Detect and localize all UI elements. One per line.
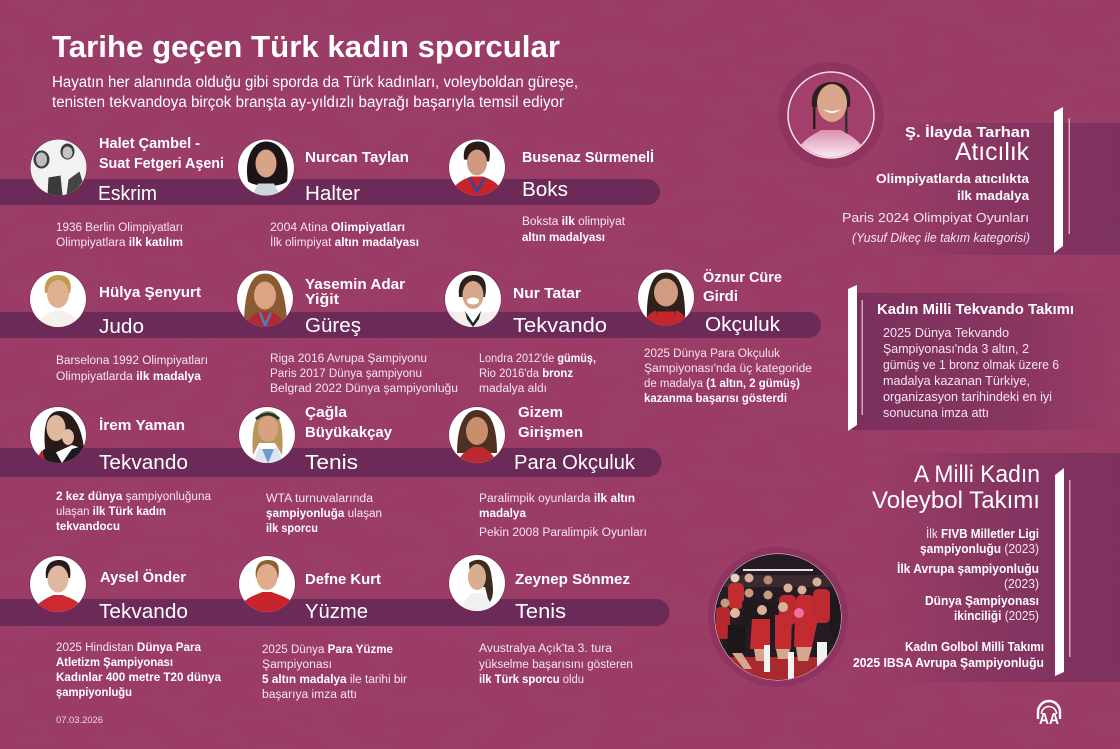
name: Suat Fetgeri Aşeni	[99, 156, 224, 172]
description: şampiyonluğu (2023)	[920, 542, 1039, 556]
sport: Tekvando	[513, 315, 607, 337]
description: 2025 Dünya Para Okçuluk	[644, 348, 780, 360]
name: Defne Kurt	[305, 572, 381, 588]
sport: Halter	[305, 183, 360, 205]
description: organizasyon tarihindeki en iyi	[883, 390, 1052, 404]
description	[270, 222, 419, 249]
description	[266, 493, 382, 535]
portrait: Busenaz Sürmeneli	[449, 140, 505, 196]
sport: Boks	[522, 179, 568, 201]
description: şampiyonluğu	[56, 687, 132, 699]
athlete: Busenaz Sürmeneli	[448, 139, 654, 244]
description	[56, 355, 208, 383]
description	[897, 527, 1039, 623]
panel: Ş. İlayda Tarhan	[778, 62, 1120, 255]
sport: Tekvando	[99, 601, 188, 623]
portrait: Yasemin Adar Yiğit	[237, 270, 293, 326]
description: Pekin 2008 Paralimpik Oyunları	[479, 527, 647, 539]
name: Gizem	[518, 405, 563, 421]
description: 2 kez dünya şampiyonluğuna	[56, 491, 212, 503]
description: Paralimpik oyunlarda ilk altın	[479, 493, 635, 505]
name: Nur Tatar	[513, 286, 581, 302]
portrait: Halet Çambel and Suat Fetgeri Aşeni	[30, 140, 86, 196]
name	[518, 405, 583, 441]
white bar	[1055, 468, 1064, 676]
description: 2025 Hindistan Dünya Para	[56, 642, 202, 654]
description: (Yusuf Dikeç ile takım kategorisi)	[852, 231, 1030, 245]
heading: Voleybol Takımı	[872, 487, 1040, 514]
description: Rio 2016'da bronz	[479, 368, 573, 380]
description: Kadınlar 400 metre T20 dünya	[56, 672, 222, 684]
name: Girişmen	[518, 425, 583, 441]
description: Boksta ilk olimpiyat	[522, 216, 626, 228]
portrait: Aysel Önder	[30, 556, 86, 612]
logo: AA	[1038, 701, 1060, 728]
description	[644, 348, 812, 405]
description: Belgrad 2022 Dünya şampiyonluğu	[270, 383, 458, 395]
name: Nurcan Taylan	[305, 150, 409, 166]
description: madalya kazanan Türkiye,	[883, 374, 1030, 388]
description: WTA turnuvalarında	[266, 493, 374, 505]
description: madalya	[479, 508, 527, 520]
logo: AA: AA	[1039, 711, 1059, 728]
description: ulaşan ilk Türk kadın	[56, 506, 166, 518]
sport: Tenis	[305, 452, 358, 474]
description	[262, 644, 407, 701]
description: de madalya (1 altın, 2 gümüş)	[644, 378, 800, 390]
band: row 1	[0, 179, 660, 205]
panel: A Milli Kadın Voleybol Takımı	[708, 453, 1120, 687]
description: Avustralya Açık'ta 3. tura	[479, 643, 613, 655]
athlete: Yasemin Adar Yiğit	[236, 270, 458, 395]
description: ilk sporcu	[266, 523, 318, 535]
description	[842, 172, 1030, 245]
description: şampiyonluğa ulaşan	[266, 508, 382, 520]
description: 2004 Atina Olimpiyatları	[270, 222, 405, 234]
athlete: Çağla Büyükakçay	[238, 405, 392, 535]
description	[479, 353, 596, 395]
date: 07.03.2026	[56, 715, 103, 726]
heading: A Milli Kadın	[914, 461, 1040, 488]
name: Busenaz Sürmenelİ	[522, 149, 654, 166]
portrait: Hülya Şenyurt	[30, 271, 86, 327]
name: Ş. İlayda Tarhan	[905, 124, 1030, 141]
name: Girdi	[703, 289, 738, 305]
name: Öznur Cüre	[703, 269, 782, 286]
white bar	[1054, 107, 1063, 253]
name	[305, 277, 405, 308]
name: Zeynep Sönmez	[515, 572, 630, 588]
athlete: Nurcan Taylan	[237, 139, 419, 249]
description: (2023)	[1004, 577, 1039, 591]
description	[56, 491, 212, 533]
name	[99, 136, 224, 172]
portrait: Nur Tatar	[445, 271, 501, 327]
description: kazanma başarısı gösterdi	[644, 393, 787, 405]
portrait: Defne Kurt	[239, 556, 295, 612]
name: Halet Çambel -	[99, 136, 200, 152]
description: Olimpiyatlarda atıcılıkta	[876, 172, 1030, 186]
sport: Judo	[99, 316, 144, 338]
athlete: Gizem Girişmen	[448, 405, 647, 539]
description: 1936 Berlin Olimpiyatları	[56, 222, 183, 234]
athlete: Hülya Şenyurt	[29, 270, 208, 383]
athlete: Halet Çambel and Suat Fetgeri Aşeni	[30, 136, 224, 249]
description: 2025 Dünya Tekvando	[883, 326, 1009, 340]
sport: Güreş	[305, 315, 361, 337]
Goalball text: 2025 IBSA Avrupa Şampiyonluğu	[853, 656, 1044, 670]
name	[703, 269, 782, 305]
white bar	[848, 285, 857, 431]
description: 2025 Dünya Para Yüzme	[262, 644, 393, 656]
band: row 3	[0, 448, 662, 477]
description: Olimpiyatlara ilk katılım	[56, 237, 183, 249]
portrait: İrem Yaman	[30, 407, 86, 463]
sport: Para Okçuluk	[514, 452, 636, 474]
description: Dünya Şampiyonası	[925, 594, 1039, 608]
portrait: Ş. İlayda Tarhan	[778, 62, 884, 168]
description	[56, 222, 183, 249]
panel: Kadın Milli Tekvando Takımı	[848, 285, 1120, 431]
description	[270, 353, 458, 395]
name: Çağla	[305, 405, 348, 421]
description: İlk olimpiyat altın madalyası	[270, 236, 419, 249]
sport: Tekvando	[99, 452, 188, 474]
sport: Atıcılık	[955, 138, 1029, 166]
description: madalya aldı	[479, 383, 547, 395]
sport: Okçuluk	[705, 314, 781, 336]
description	[479, 643, 633, 686]
sport: Yüzme	[305, 601, 368, 623]
description	[522, 216, 626, 244]
name	[305, 405, 392, 441]
portrait: Gizem Girişmen	[449, 407, 505, 463]
athlete: İrem Yaman	[29, 406, 212, 533]
description: 5 altın madalya ile tarihi bir	[262, 674, 407, 686]
description: Londra 2012'de gümüş,	[479, 353, 596, 365]
portrait: Zeynep Sönmez	[449, 555, 505, 611]
title: Tarihe geçen Türk kadın sporcular	[52, 29, 560, 64]
description: Şampiyonası	[262, 659, 332, 671]
description: Olimpiyatlarda ilk madalya	[56, 371, 202, 383]
portrait: Çağla Büyükakçay	[239, 407, 295, 463]
name: Yasemin Adar	[305, 277, 405, 293]
team photo	[708, 547, 848, 687]
athlete: Nur Tatar	[444, 270, 607, 395]
description: Paris 2024 Olimpiyat Oyunları	[842, 211, 1029, 225]
sport: Eskrim	[98, 183, 157, 205]
athlete: Öznur Cüre Girdi	[637, 269, 812, 405]
description: ilk madalya	[957, 189, 1030, 203]
portrait: Nurcan Taylan	[238, 140, 294, 196]
name: Hülya Şenyurt	[99, 285, 201, 301]
description: sonucuna imza attı	[883, 406, 989, 420]
subtitle: Hayatın her alanında olduğu gibi sporda da Türk kadınları, voleyboldan güreşe,	[52, 74, 578, 91]
description: İlk FIVB Milletler Ligi	[926, 527, 1039, 541]
description: ilk Türk sporcu oldu	[479, 674, 584, 686]
description: tekvandocu	[56, 521, 120, 533]
band: row 2	[0, 312, 821, 338]
name: İrem Yaman	[99, 417, 185, 434]
subtitle: tenisten tekvandoya birçok branşta ay-yıldızlı bayrağı başarıyla temsil ediyor	[52, 94, 564, 111]
description: yükselme başarısını gösteren	[479, 659, 633, 671]
heading	[872, 461, 1040, 514]
description: Atletizm Şampiyonası	[56, 657, 173, 669]
description: başarıya imza attı	[262, 689, 357, 701]
description	[56, 642, 222, 699]
description: ikinciliği (2025)	[954, 609, 1039, 623]
description: İlk Avrupa şampiyonluğu	[897, 561, 1039, 576]
description: altın madalyası	[522, 232, 605, 244]
sport: Tenis	[515, 601, 566, 623]
athlete: Defne Kurt	[238, 555, 407, 701]
Goalball text	[853, 640, 1044, 670]
athlete: Aysel Önder	[29, 555, 222, 699]
description	[883, 326, 1059, 420]
name: Aysel Önder	[100, 569, 186, 586]
description: Şampiyonası'nda üç kategoride	[644, 363, 812, 375]
band: row 4	[0, 599, 670, 626]
name: Büyükakçay	[305, 425, 392, 441]
description	[479, 493, 647, 539]
description: Paris 2017 Dünya şampiyonu	[270, 368, 422, 380]
description: Riga 2016 Avrupa Şampiyonu	[270, 353, 427, 365]
Goalball text: Kadın Golbol Milli Takımı	[905, 640, 1044, 654]
description: gümüş ve 1 bronz olmak üzere 6	[883, 358, 1059, 372]
heading: Kadın Milli Tekvando Takımı	[877, 302, 1074, 318]
portrait: Öznur Cüre Girdi	[638, 270, 694, 326]
description: Barselona 1992 Olimpiyatları	[56, 355, 208, 367]
subtitle	[52, 74, 578, 111]
description: Şampiyonası'nda 3 altın, 2	[883, 342, 1029, 356]
athlete: Zeynep Sönmez	[448, 554, 633, 686]
name: Yiğit	[305, 292, 339, 308]
